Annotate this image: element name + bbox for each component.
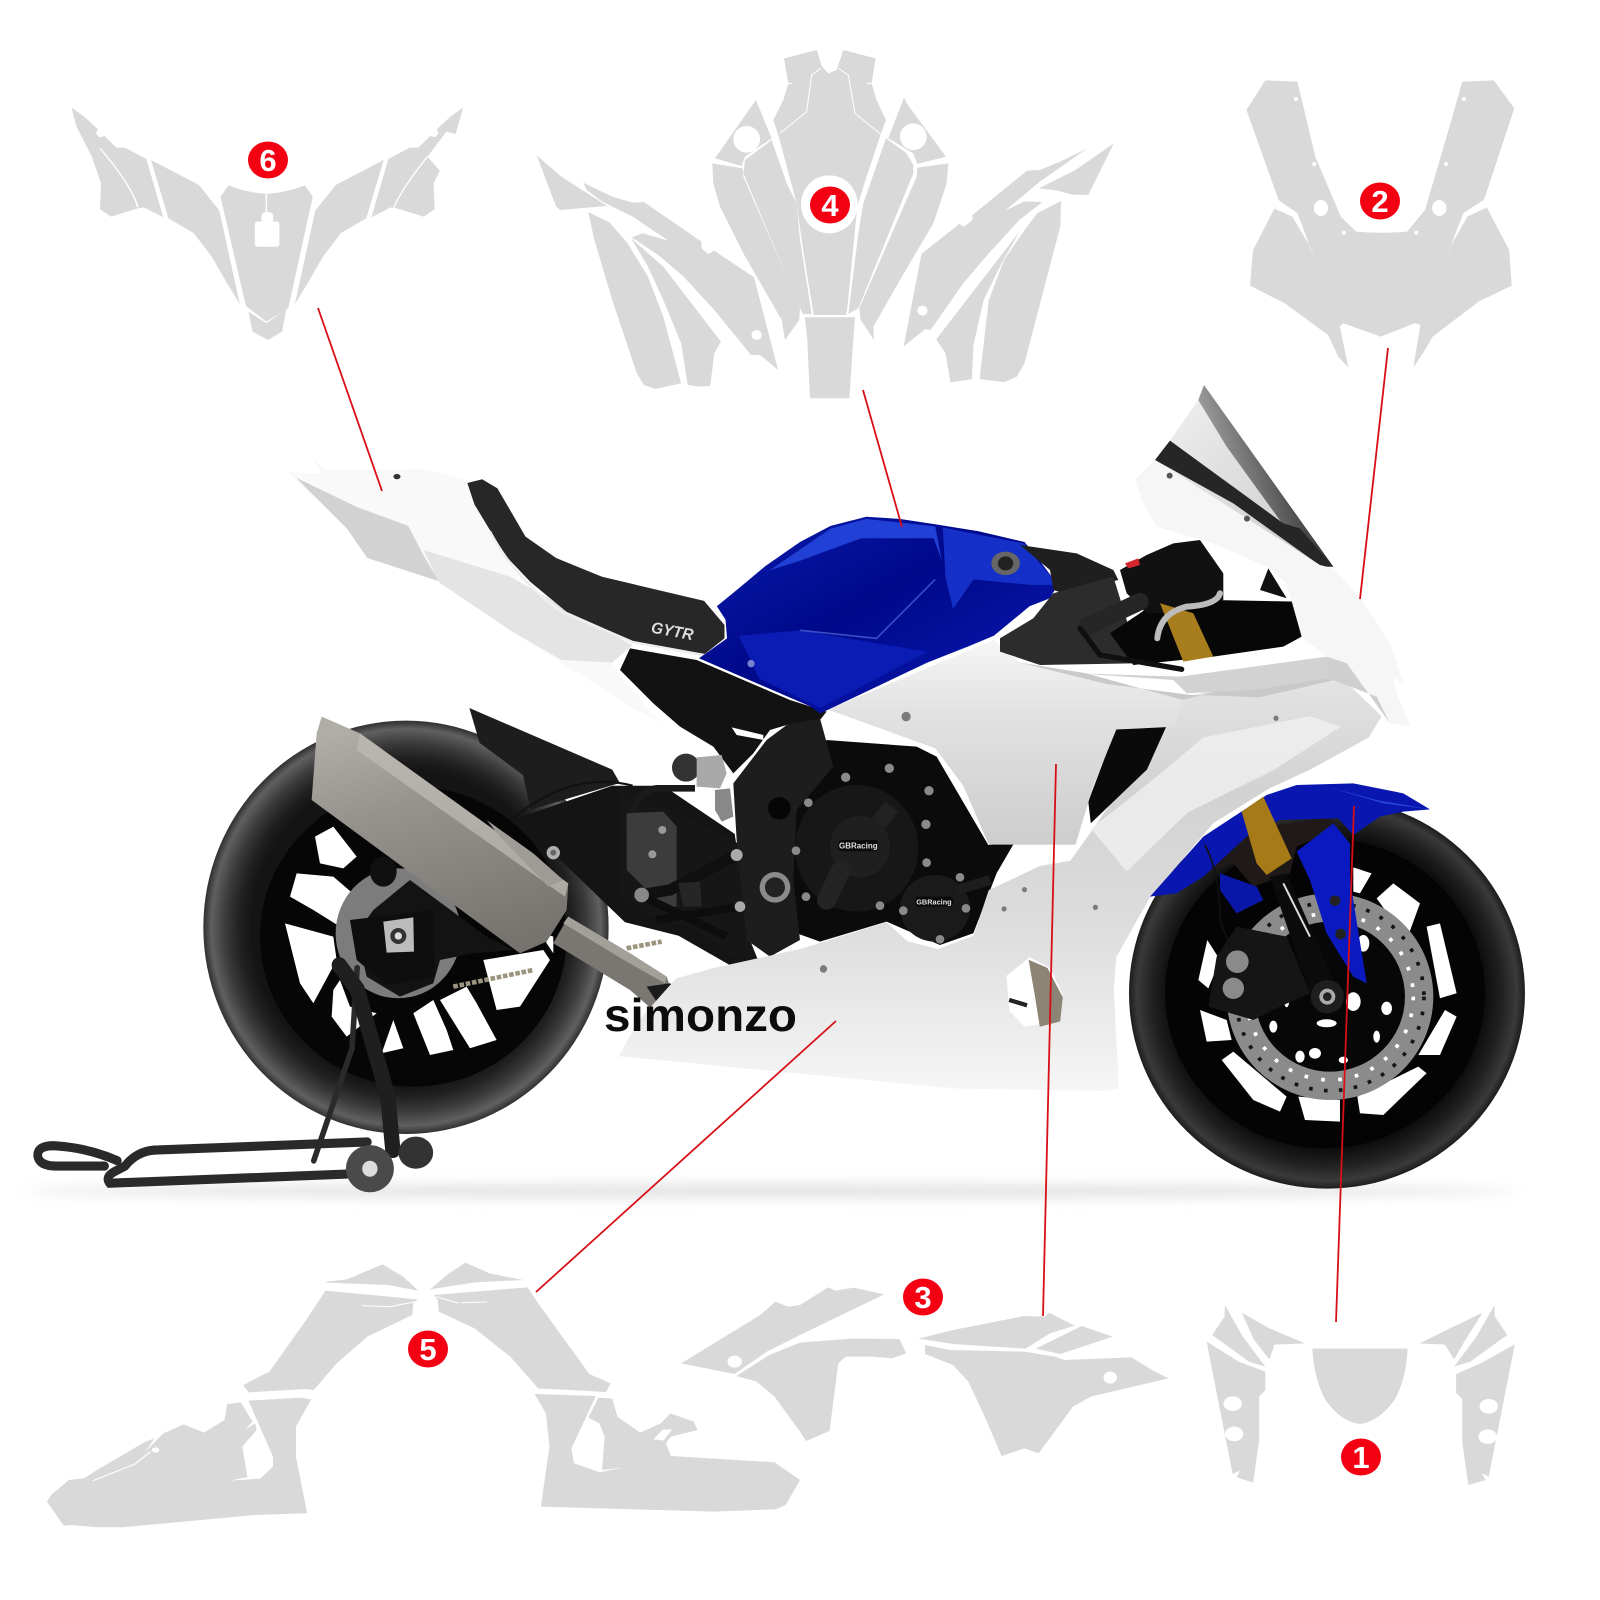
- rear swingarm end: [357, 880, 513, 997]
- belly lower right: [535, 1394, 800, 1512]
- axle: [1311, 980, 1344, 1013]
- belly upper right: [434, 1287, 611, 1392]
- cable: [510, 782, 633, 821]
- fender right lower: [1456, 1344, 1515, 1485]
- badge 1: 1: [1352, 1440, 1370, 1475]
- fork guard bolts: [1330, 895, 1346, 939]
- belly top fins: [327, 1263, 523, 1291]
- radiator gap: [1088, 724, 1167, 823]
- fender left lower: [1207, 1342, 1265, 1483]
- part 4: tank decals: [537, 50, 1114, 398]
- fairing bolts: [820, 712, 1279, 973]
- belly lower left: [47, 1398, 311, 1527]
- tail left outer: [71, 107, 163, 217]
- fork guard: [1297, 823, 1367, 983]
- side left upper: [681, 1287, 884, 1374]
- rear wheel spoke windows: [285, 827, 553, 1055]
- carbon heel plate: [627, 812, 677, 907]
- side holes: [728, 1356, 1117, 1384]
- side left lower: [736, 1339, 906, 1441]
- motorcycle: [38, 385, 1525, 1192]
- ground shadow: [25, 1184, 1515, 1198]
- rear linkage area: [620, 787, 760, 965]
- tail right outer: [371, 107, 463, 217]
- fuel tank: [699, 517, 1058, 713]
- tail tip: [248, 309, 286, 340]
- cockpit interior: [1110, 540, 1302, 665]
- swingarm: [510, 786, 755, 968]
- leader lines: [318, 308, 1388, 1322]
- watermark: simonzo: [604, 989, 797, 1041]
- fender centre: [1312, 1349, 1408, 1424]
- fairing holes and slits: [1272, 97, 1487, 267]
- tail centre: [220, 185, 313, 322]
- front grey sweep: [1019, 662, 1341, 700]
- right side panels: [888, 97, 946, 164]
- frame holes: [760, 797, 791, 903]
- pickup cover: GBRacing: [916, 897, 952, 906]
- rearset levers: [634, 826, 745, 937]
- seat: [467, 479, 727, 656]
- exhaust gap: [1007, 957, 1063, 1027]
- windscreen: [1155, 385, 1333, 567]
- caliper: [1208, 927, 1310, 1020]
- engine and frame: [620, 648, 1015, 965]
- engine bolts: [792, 764, 970, 944]
- badge 3: 3: [914, 1280, 932, 1315]
- lower spine: [805, 317, 855, 398]
- front brake disc: [1227, 893, 1433, 1100]
- engine block: [787, 740, 1015, 945]
- belly upper left: [243, 1291, 417, 1392]
- rear stand: [38, 965, 433, 1192]
- belly slits: [93, 1297, 671, 1481]
- chain: [453, 970, 533, 987]
- tail left inner: [151, 160, 240, 304]
- badge 2: 2: [1371, 184, 1389, 219]
- badge 4: [810, 186, 850, 224]
- side panel: [828, 640, 1183, 845]
- chain adjuster: [350, 910, 435, 985]
- fairing outline: [1246, 80, 1514, 368]
- fork gold: [1242, 797, 1292, 875]
- badge 4: 4: [821, 188, 839, 223]
- hugger: [469, 708, 620, 810]
- under fender: [1157, 817, 1333, 893]
- clutch cover: GBRacing: [839, 841, 878, 850]
- cowl sweep: [1077, 657, 1328, 693]
- left side panels: [715, 100, 772, 166]
- part 5: belly pan decals: [47, 1263, 800, 1527]
- seat logo: GYTR: [650, 619, 695, 644]
- pickup cover: [900, 875, 990, 942]
- rear wheel: [203, 721, 609, 1134]
- tank right wing: [904, 143, 1114, 382]
- upper cowl: [1135, 460, 1411, 727]
- front wheel: [1129, 798, 1525, 1189]
- tank hairlines: [780, 68, 882, 316]
- rear subframe: [620, 648, 827, 773]
- tail fairing: [288, 455, 661, 722]
- front fairing streak: [1091, 716, 1341, 871]
- badge 2: [1360, 182, 1400, 220]
- brake reservoir: [627, 754, 733, 827]
- upper fairing and screen: [1000, 385, 1411, 727]
- tank holes: [733, 123, 927, 233]
- part 6: tail decals: [71, 107, 463, 340]
- part 3: side panel decals: [681, 1287, 1168, 1456]
- part 1: front fender decals: [1207, 1305, 1515, 1485]
- front wheel spoke windows: [1198, 867, 1457, 1122]
- exhaust silencer: [312, 717, 683, 1013]
- side right small: [1036, 1326, 1113, 1354]
- tank head and spine: [773, 50, 886, 315]
- handlebar and lever: [1080, 593, 1220, 669]
- fork leg: [1270, 873, 1333, 993]
- fender left top: [1212, 1305, 1305, 1367]
- vent panel: [1020, 545, 1118, 593]
- badge 1: [1341, 1438, 1381, 1476]
- fender right top: [1419, 1305, 1507, 1367]
- badge 6: 6: [259, 143, 277, 178]
- front fender and fork: [1150, 783, 1430, 1020]
- main frame plate: [733, 718, 833, 957]
- badge 5: [408, 1330, 448, 1368]
- part 2: upper fairing decals: [1246, 80, 1514, 368]
- side right main: [925, 1345, 1168, 1456]
- badge 5: 5: [419, 1332, 437, 1367]
- tank centre: [712, 50, 948, 398]
- rear disc: [336, 868, 461, 998]
- badge 3: [903, 1278, 943, 1316]
- tank left wing: [537, 155, 778, 389]
- tail slits and cutout: [100, 148, 428, 247]
- side right upper strip: [918, 1313, 1074, 1349]
- badge 6: [248, 142, 288, 178]
- chain segment: [627, 942, 662, 948]
- fender holes: [1223, 1396, 1498, 1444]
- fender: [1150, 783, 1430, 897]
- rear caliper: [370, 857, 397, 887]
- subframe gap: [732, 727, 763, 740]
- brake hose: [1205, 845, 1230, 947]
- dark side panel: [1000, 577, 1140, 665]
- tail right inner: [295, 160, 384, 304]
- clutch cover: [795, 785, 918, 912]
- lower and front fairing: [619, 662, 1382, 1091]
